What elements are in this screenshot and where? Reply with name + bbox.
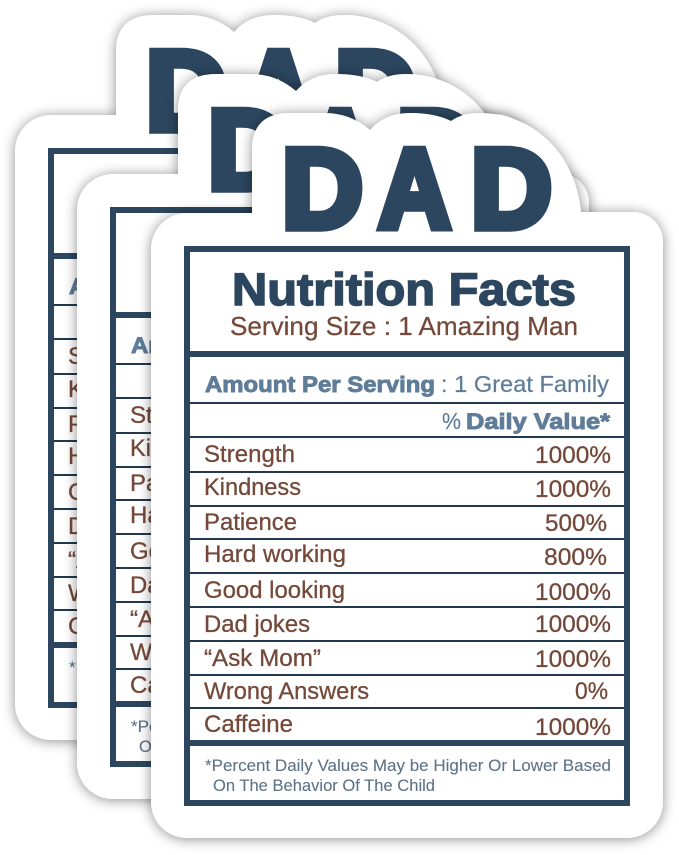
table text: Strength	[130, 402, 221, 429]
heading: Nutrition Facts: Nutrition Facts	[232, 264, 576, 315]
nutrient values: 1000%	[535, 646, 611, 673]
daily value header: %	[442, 408, 461, 434]
table frame	[48, 148, 494, 708]
table text: Wrong Answers	[68, 580, 233, 607]
table text: Amount Per Serving	[131, 333, 361, 358]
footnote: *Percent Daily Values May be Higher Or Lower Based	[205, 757, 611, 775]
DAD wordmark: D	[471, 126, 552, 252]
table text: Wrong Answers	[130, 639, 295, 666]
table text: Dad jokes	[130, 572, 236, 599]
table text: *Percent Daily Values May be Higher Or Lower Based	[69, 659, 475, 677]
table text: “Ask Mom”	[68, 547, 185, 574]
DAD wordmark	[282, 126, 552, 252]
nutrient labels	[204, 441, 369, 738]
nutrient values: 1000%	[535, 579, 611, 606]
nutrient values: 500%	[545, 510, 607, 537]
DAD wordmark	[146, 28, 416, 154]
table text: Good looking	[130, 538, 271, 565]
DAD wordmark: D	[397, 88, 478, 212]
table text: Patience	[130, 470, 223, 497]
nutrient values: 1000%	[535, 442, 611, 469]
nutrient values: 1000%	[535, 714, 611, 741]
front sticker	[151, 113, 663, 838]
DAD wordmark: D	[335, 28, 416, 154]
nutrient labels: Hard working	[204, 541, 346, 568]
table text	[68, 274, 475, 697]
table frame	[184, 246, 630, 806]
table text: Hard working	[130, 502, 272, 529]
nutrient labels: Caffeine	[204, 711, 293, 738]
DAD wordmark: A	[304, 88, 376, 212]
table text: Dad jokes	[68, 513, 174, 540]
DAD wordmark: D	[146, 28, 227, 154]
sticker outline	[15, 15, 527, 740]
table text	[130, 333, 537, 756]
daily value header: Daily Value*	[466, 409, 610, 434]
footnote	[205, 757, 611, 795]
nutrient values: 1000%	[535, 611, 611, 638]
sticker outline	[77, 74, 589, 799]
nutrient labels: “Ask Mom”	[204, 645, 321, 672]
amount per serving: Amount Per Serving	[205, 372, 435, 397]
nutrient values	[535, 442, 611, 741]
table text: Caffeine	[68, 613, 157, 640]
nutrient values: 1000%	[535, 476, 611, 503]
table text: Patience	[68, 411, 161, 438]
background sticker	[15, 15, 527, 740]
table text: Amount Per Serving	[69, 274, 299, 299]
nutrient labels: Patience	[204, 509, 297, 536]
nutrient values: 0%	[575, 678, 608, 705]
table text: Strength	[68, 343, 159, 370]
table text: Kindness	[130, 435, 227, 462]
footnote: On The Behavior Of The Child	[213, 777, 435, 795]
nutrient labels: Kindness	[204, 474, 301, 501]
nutrient values: 800%	[544, 544, 607, 571]
table text: Good looking	[68, 479, 209, 506]
DAD wordmark: D	[282, 126, 363, 252]
table text: *Percent Daily Values May be Higher Or Lower Based	[131, 718, 537, 736]
table frame	[110, 207, 556, 767]
amount per serving: : 1 Great Family	[441, 371, 609, 397]
table text: Kindness	[68, 376, 165, 403]
DAD wordmark: A	[242, 28, 314, 154]
DAD wordmark: D	[208, 88, 289, 212]
table text: On The Behavior Of The Child	[77, 679, 299, 697]
serving size: Serving Size : 1 Amazing Man	[230, 311, 578, 341]
sticker outline	[151, 113, 663, 838]
DAD wordmark	[208, 88, 478, 212]
nutrient labels: Dad jokes	[204, 611, 310, 638]
table text: Caffeine	[130, 672, 219, 699]
amount per serving	[205, 371, 609, 397]
nutrient labels: Good looking	[204, 577, 345, 604]
nutrient labels: Wrong Answers	[204, 678, 369, 705]
middle sticker	[77, 74, 589, 799]
DAD wordmark: A	[378, 126, 450, 252]
table text: On The Behavior Of The Child	[139, 738, 361, 756]
table text: Hard working	[68, 443, 210, 470]
nutrient labels: Strength	[204, 441, 295, 468]
table text: “Ask Mom”	[130, 606, 247, 633]
